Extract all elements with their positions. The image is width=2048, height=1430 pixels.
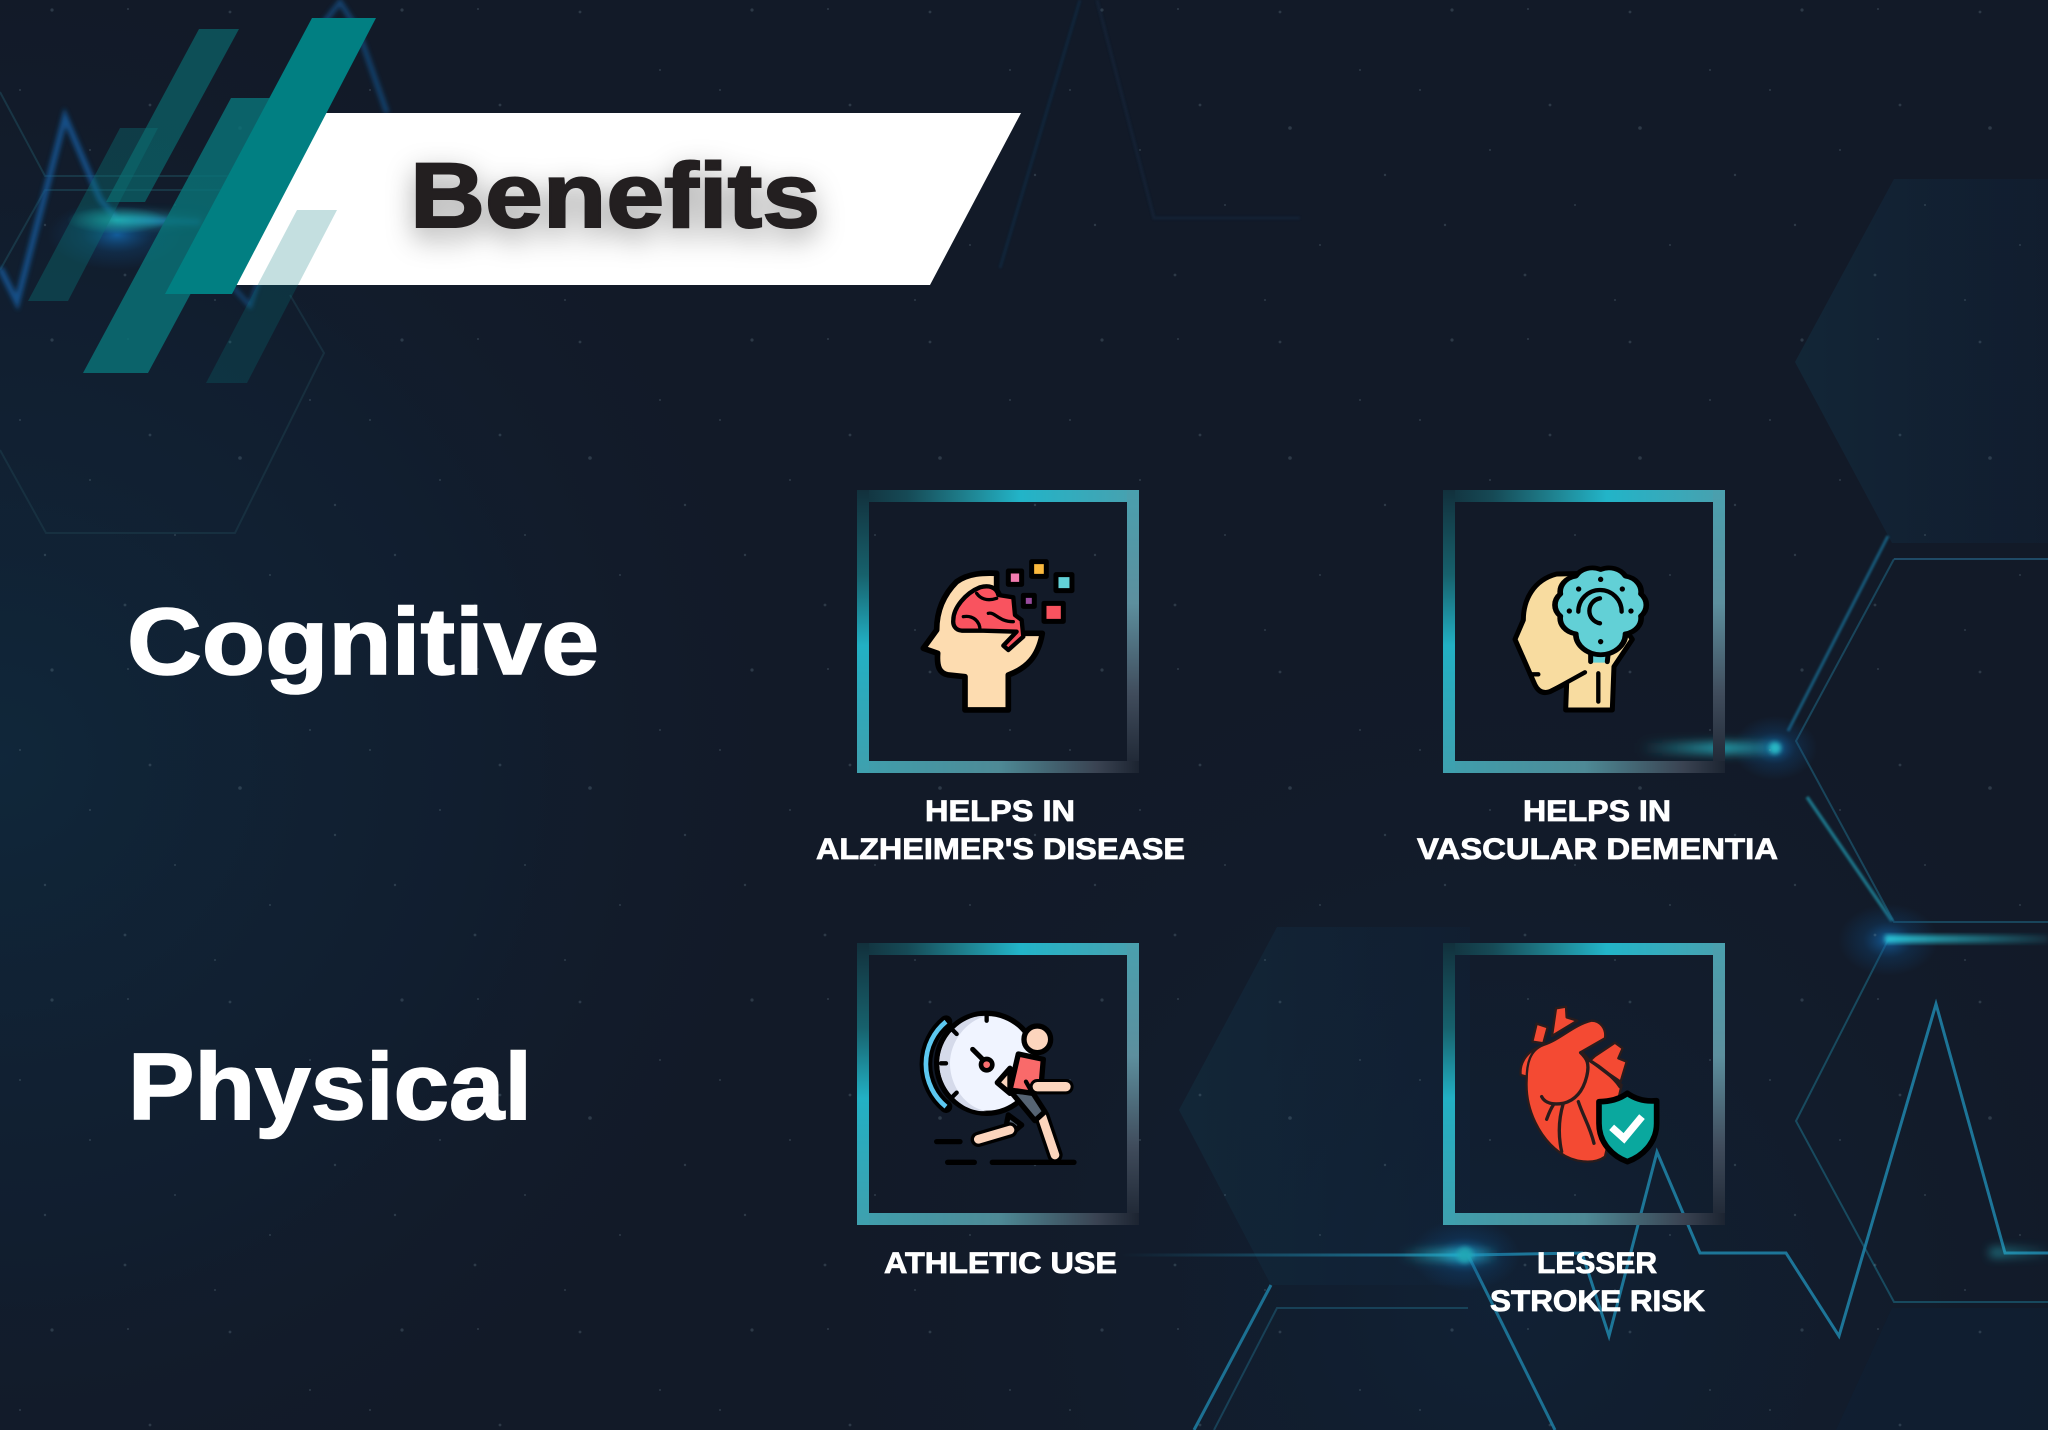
label: helps in vascular dementia: VASCULAR DEMENTIA [1417, 833, 1778, 866]
label: lesser stroke risk [1490, 1247, 1705, 1318]
stripe: translucent overlay bar [206, 210, 337, 383]
stripe: far-left faint bar [28, 128, 158, 301]
icon: brain dissolving from head [923, 562, 1072, 710]
icon: runner and stopwatch [926, 1013, 1074, 1162]
label: helps in Alzheimer's disease: ALZHEIMER'S DISEASE [816, 833, 1185, 866]
label: lesser stroke risk: LESSER [1537, 1247, 1657, 1280]
stripe: second teal bar [83, 98, 296, 373]
label: helps in Alzheimer's disease: HELPS IN [925, 795, 1075, 828]
label: helps in Alzheimer's disease [816, 795, 1185, 866]
title: Benefits [410, 145, 820, 247]
icon: heart with shield [1521, 1007, 1657, 1162]
label: athletic use: ATHLETIC USE [884, 1247, 1117, 1280]
label: lesser stroke risk: STROKE RISK [1490, 1285, 1705, 1318]
banner: white panel [233, 113, 1021, 285]
card frame: athletic use [857, 943, 1139, 1225]
heading: Physical: Physical [128, 1034, 532, 1140]
icon: head with blue brain [1515, 568, 1646, 710]
heading: Cognitive: Cognitive [127, 589, 599, 695]
title banner with teal stripes [28, 18, 1021, 383]
card frame: vascular dementia [1443, 490, 1725, 773]
card frame: lesser stroke risk [1443, 943, 1725, 1225]
label: helps in vascular dementia [1417, 795, 1778, 866]
stripe: upper slim bar [106, 29, 239, 202]
stripe: main teal bar [165, 18, 376, 294]
label: helps in vascular dementia: HELPS IN [1523, 795, 1671, 828]
card frame: Alzheimer's [857, 490, 1139, 773]
